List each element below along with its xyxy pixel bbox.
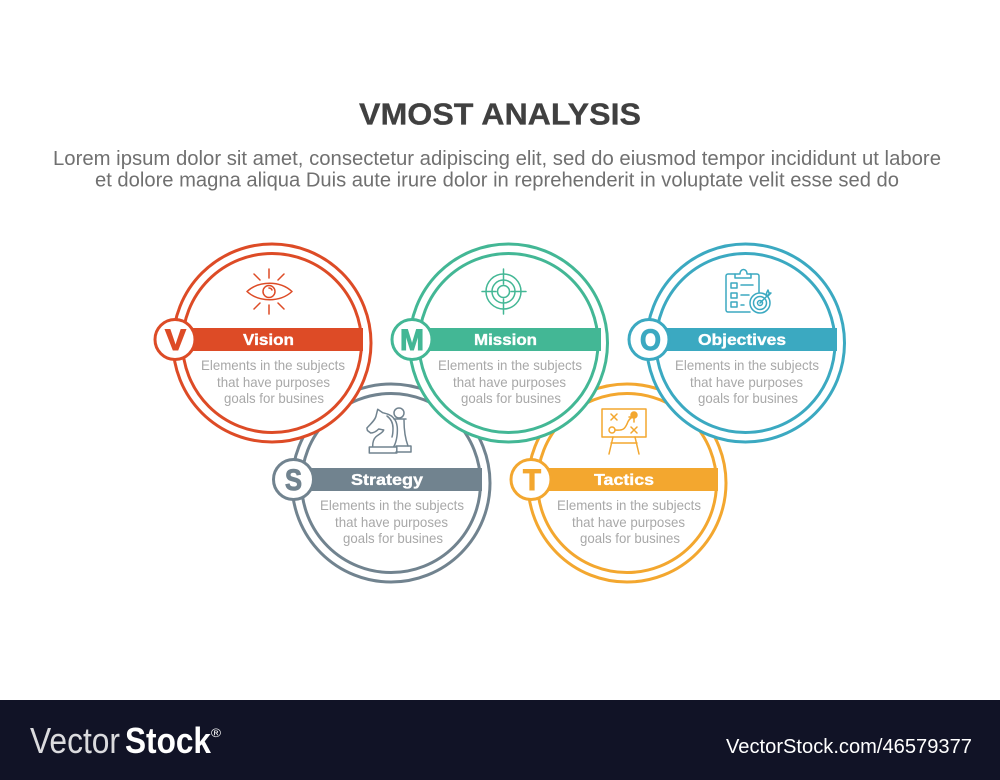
- tactics description: Elements in the subjects: [557, 497, 701, 513]
- tactics badge: T: [523, 464, 541, 497]
- vision description: goals for busines: [224, 390, 324, 406]
- subtitle text: Lorem ipsum dolor sit amet, consectetur adipiscing elit, sed do eiusmod tempor incididunt ut labore: [53, 148, 941, 170]
- vision bar: [175, 328, 363, 351]
- footer logo: ®: [211, 726, 221, 740]
- objectives rings: [646, 244, 844, 442]
- strategy description: that have purposes: [335, 514, 448, 530]
- objectives bar: [649, 328, 837, 351]
- vision label: Vision: [243, 332, 294, 349]
- objectives badge: O: [640, 324, 661, 357]
- mission label: Mission: [474, 332, 537, 349]
- panel: mission: [392, 244, 608, 442]
- strategy rings: [292, 384, 490, 582]
- vision badge: V: [165, 324, 186, 357]
- tactics bar: [531, 468, 718, 491]
- objectives description: Elements in the subjects: [675, 357, 819, 373]
- icon: target crosshair: [482, 269, 526, 314]
- footer image id: VectorStock.com/46579377: [726, 736, 972, 758]
- tactics description: that have purposes: [572, 514, 685, 530]
- vision description: that have purposes: [217, 374, 330, 390]
- objectives description: goals for busines: [698, 390, 798, 406]
- mission badge: [392, 320, 432, 360]
- objectives description: [675, 357, 819, 406]
- title: VMOST ANALYSIS: [359, 96, 641, 132]
- icon: clipboard with target: [726, 270, 771, 313]
- strategy description: goals for busines: [343, 530, 443, 546]
- panel: vision: [155, 244, 371, 442]
- strategy badge: S: [285, 464, 302, 497]
- mission description: [438, 357, 582, 406]
- mission description: Elements in the subjects: [438, 357, 582, 373]
- tactics badge: [511, 460, 551, 500]
- panel: tactics: [511, 384, 726, 582]
- tactics rings: [528, 384, 726, 582]
- strategy description: [320, 497, 464, 546]
- panel: strategy: [274, 384, 490, 582]
- subtitle text: [53, 148, 941, 192]
- strategy badge: [274, 460, 314, 500]
- strategy description: Elements in the subjects: [320, 497, 464, 513]
- tactics description: goals for busines: [580, 530, 680, 546]
- vision rings: [173, 244, 371, 442]
- vision badge: [155, 320, 195, 360]
- mission description: that have purposes: [453, 374, 566, 390]
- mission description: goals for busines: [461, 390, 561, 406]
- strategy label: Strategy: [351, 472, 423, 489]
- objectives badge: [629, 320, 669, 360]
- icon: tactics board: [602, 409, 646, 454]
- objectives label: Objectives: [698, 332, 786, 349]
- strategy bar: [293, 468, 482, 491]
- icon: eye: [247, 269, 292, 314]
- objectives description: that have purposes: [690, 374, 803, 390]
- footer logo: Vector: [30, 720, 120, 761]
- mission bar: [412, 328, 601, 351]
- tactics description: [557, 497, 701, 546]
- subtitle text: et dolore magna aliqua Duis aute irure dolor in reprehenderit in voluptate velit esse sed do: [95, 170, 899, 192]
- panel: objectives: [629, 244, 844, 442]
- tactics label: Tactics: [594, 472, 654, 489]
- icon: chess knight and pawn: [367, 408, 411, 453]
- vision description: [201, 357, 345, 406]
- footer logo: [30, 720, 221, 761]
- vision description: Elements in the subjects: [201, 357, 345, 373]
- mission badge: M: [400, 324, 424, 357]
- footer bar: [0, 700, 1000, 780]
- mission rings: [410, 244, 608, 442]
- footer logo: Stock: [125, 720, 212, 761]
